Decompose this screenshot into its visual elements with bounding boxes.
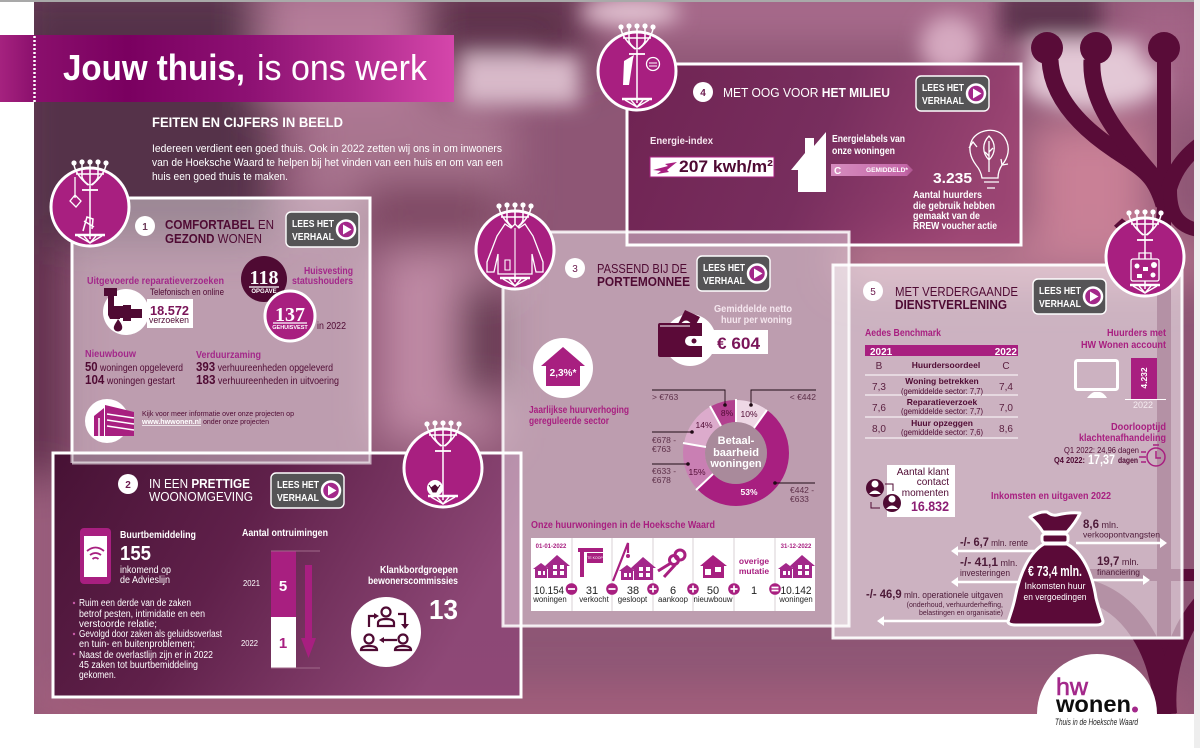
title banner [0,35,454,102]
button [286,212,359,247]
new build: 50 woningen opgeleverd [85,359,183,374]
voucher stat [913,170,997,232]
stock table: 38 [627,585,639,597]
heading: DIENSTVERLENING [895,297,1007,312]
stock table: mutatie [739,566,769,576]
stock table: 01-01-2022 [536,544,567,550]
logo: hw wonen: hw [1056,674,1089,701]
status holders: 137 [275,304,305,326]
stock table [531,519,815,611]
heading [165,217,274,246]
income and expenses: -/- 6,7 mln. rente [960,535,1028,549]
voucher stat: RREW voucher actie [913,221,997,232]
icon: keys [658,550,685,577]
status holders: statushouders [292,275,353,287]
energy index [650,135,774,177]
account stat: HW Wonen account [1081,339,1166,351]
chart: evictions: 1 [279,635,287,652]
bullets: Naast de overlastlijn zijn er in 2022 [79,650,213,661]
icon: houses end [778,555,815,578]
stock table: nieuwbouw [693,595,733,604]
status holders [241,256,353,341]
chart: affordability donut [652,390,816,504]
stock table: 10.142 [780,585,812,597]
decorative coat rack silhouette [1031,32,1200,714]
number 5 [863,281,883,301]
title [63,47,428,88]
chart: evictions [241,527,328,668]
complaints handling [1054,421,1166,467]
new build [85,348,183,387]
stock table: 50 [707,585,719,597]
heading: PASSEND BIJ DE [597,261,687,276]
icon: new house [700,555,727,578]
sustainability: Verduurzaming [196,349,261,361]
income and expenses: Inkomsten en uitgaven 2022 [991,490,1111,502]
customer contacts: contact [917,477,949,488]
voucher stat: 3.235 [933,170,972,187]
mediation [120,529,196,586]
panel: light fills [72,198,1182,638]
complaints handling: dagen [1118,456,1138,465]
account stat: 4.232 [1139,367,1149,389]
icon: monitor [1076,360,1118,398]
bullets: verstoorde relatie; [79,619,157,630]
chart: affordability donut: baarheid [713,447,759,459]
stock table: gesloopt [618,595,648,604]
icon: coat rack with jacket [598,23,676,110]
number 2 [118,474,138,494]
income and expenses: € 73,4 mln. [1028,563,1082,580]
energy labels: Energielabels van [832,134,905,145]
income and expenses: investeringen [960,568,1010,578]
stock table: verkocht [579,595,610,604]
sounding boards: 13 [429,594,458,625]
average rent: Gemiddelde netto [714,304,792,315]
heading: MET OOG VOOR HET MILIEU [723,85,890,100]
panel 1: comfortabel en gezond wonen [51,159,359,443]
icon: money bag [1008,512,1103,625]
arrows [877,538,1167,626]
benchmark table: 8,6 [999,424,1013,435]
button [271,473,344,508]
repair requests: verzoeken [149,315,189,326]
complaints handling: Doorlooptijd [1111,421,1166,433]
income and expenses [866,490,1167,626]
heading: COMFORTABEL EN [165,217,274,232]
repair requests: 18.572 [150,303,189,318]
icon: house silhouette [791,132,826,192]
repair requests: Uitgevoerde reparatieverzoeken [87,275,224,287]
income and expenses: verkoopontvangsten [1083,530,1160,540]
heading [149,476,253,504]
icon: demolition [613,543,656,581]
voucher stat: Aantal huurders [913,190,982,201]
heading: IN EEN PRETTIGE [149,476,250,491]
complaints handling: Q1 2022: 24,96 dagen [1064,445,1139,455]
button [916,76,989,111]
bullets: 45 zaken tot buurtbemiddeling [79,660,198,671]
benchmark table: Woning betrekken [905,376,979,386]
logo: hw wonen: Thuis in de Hoeksche Waard [1055,717,1138,728]
bullets: Ruim een derde van de zaken [79,598,191,609]
benchmark table: 2022 [995,347,1017,358]
chart: affordability donut: 53% [740,487,758,497]
chart: affordability donut: 10% [740,409,758,419]
stock table: 10.154 [534,585,564,597]
chart: affordability donut: Betaal- [718,435,755,447]
chart: affordability donut: €678 [652,475,671,485]
button [1033,279,1106,314]
account stat [1076,327,1166,410]
benchmark table: (gemiddelde sector: 7,7) [901,386,983,396]
chart: affordability donut: €763 [652,444,671,454]
chart: evictions: Aantal ontruimingen [242,527,328,539]
account stat: Huurders met [1107,327,1166,339]
complaints handling: Q4 2022: [1054,456,1085,465]
chart: evictions: 2021 [243,578,260,588]
sustainability [196,349,339,387]
number 5: 5 [870,287,876,298]
number 1 [135,216,155,236]
benchmark table [865,327,1018,438]
benchmark table: C [1002,361,1010,372]
icon: coat rack with suitcase [1106,209,1184,296]
benchmark table: 7,6 [872,403,886,414]
number 4 [693,82,713,102]
icon: houses start [533,555,570,578]
repair requests [87,275,224,335]
bullets [73,598,222,681]
chart: affordability donut: €633 - [652,466,676,476]
icon: coat rack with coat [476,202,554,289]
icon: people [866,479,901,512]
stock table: overige [739,556,769,566]
panel: dark fills [53,64,1021,697]
rent increase: 2,3%* [550,368,576,379]
energy labels: onze woningen [832,146,895,157]
status holders: 118 [250,267,278,289]
intro text: huis een goed thuis te maken. [152,171,288,183]
project link: Kijk voor meer informatie over onze projecten op [142,411,294,418]
mediation: de Advieslijn [120,575,170,586]
stock table: Onze huurwoningen in de Hoeksche Waard [531,519,715,531]
average rent [658,304,792,366]
benchmark table: Huur opzeggen [911,418,973,428]
arrow: decrease [301,565,316,658]
status holders: OPGAVE [251,289,277,295]
sustainability: 183 verhuureenheden in uitvoering [196,372,339,387]
chart: affordability donut: €678 - [652,435,676,445]
heading: MET VERDERGAANDE [895,284,1018,299]
energy labels: C [834,166,841,177]
energy index: Energie-index [650,135,713,147]
bullets: gekomen. [79,670,116,681]
stock table: 31 [586,585,598,597]
benchmark table: 2021 [870,347,893,358]
heading [597,261,690,289]
chart: affordability donut: 8% [721,408,734,418]
stock table: 1 [751,585,757,597]
income and expenses: en vergoedingen [1024,592,1086,603]
complaints handling: 17,37 [1088,451,1115,467]
stock table: 31-12-2022 [781,544,812,550]
customer contacts: Aantal klant [897,467,949,478]
energy index: 207 kwh/m² [679,157,773,176]
sounding boards: Klankbordgroepen [380,564,458,576]
benchmark table: (gemiddelde sector: 7,6) [901,427,983,437]
intro text: Iedereen verdient een goed thuis. Ook in 2022 zetten wij ons in om inwoners [152,143,502,155]
number 3: 3 [572,264,578,275]
status holders: Huisvesting [304,265,353,277]
customer contacts [866,465,955,517]
panel 2: in een prettige woonomgeving [73,420,482,681]
benchmark table: B [876,361,883,372]
income and expenses: Inkomsten huur [1024,581,1086,592]
project link: www.hwwonen.nl [141,419,201,426]
repair requests: Telefonisch en online [150,287,224,297]
number 1: 1 [142,222,148,233]
button [697,256,770,291]
heading: WOONOMGEVING [149,489,253,504]
panel 3: passend bij de portemonnee [476,202,816,611]
rent increase [529,338,629,427]
stock table: woningen [532,595,567,604]
bullets: en tuin- en buitenproblemen; [79,639,195,650]
heading [895,284,1018,312]
new build: 104 woningen gestart [85,372,175,387]
logo: hw wonen: wonen [1055,691,1131,717]
title: Jouw thuis, [63,47,245,88]
heading: GEZOND WONEN [165,231,262,246]
chart: evictions: 2022 [241,638,258,648]
icon: coat rack with football [404,420,482,507]
customer contacts: 16.832 [911,498,949,514]
benchmark table: 7,0 [999,403,1013,414]
icon: bulb with leaf [969,130,1008,188]
benchmark table: (gemiddelde sector: 7,7) [901,406,983,416]
heading: PORTEMONNEE [597,274,690,289]
benchmark table: 7,3 [872,382,886,393]
account stat: 2022 [1133,400,1153,410]
status holders: in 2022 [317,321,346,332]
benchmark table: 8,0 [872,424,886,435]
number 2: 2 [125,480,131,491]
project link [141,411,294,426]
icon: participation circle [351,597,421,667]
energy labels: GEMIDDELD* [866,168,909,174]
stock table: woningen [778,595,813,604]
voucher stat: die gebruik hebben [913,201,995,212]
average rent: € 604 [717,334,761,353]
rent increase: Jaarlijkse huurverhoging [529,405,629,416]
bullets: Gevolgd door zaken als geluidsoverlast [79,629,222,640]
income and expenses: -/- 46,9 mln. operationele uitgaven [866,587,1003,601]
mediation: Buurtbemiddeling [120,529,196,541]
icon: stopwatch [1139,445,1165,466]
complaints handling: klachtenafhandeling [1079,432,1166,444]
panel 4: met oog voor het milieu [598,23,1008,232]
icon: coat rack with keys [51,159,129,246]
logo: hw wonen [1037,654,1157,728]
rent increase: gereguleerde sector [529,416,609,427]
income and expenses: -/- 41,1 mln. [960,555,1018,569]
sounding boards [368,564,458,625]
icon: for sale sign: TE KOOP [587,556,603,560]
bullets: betrof pesten, intimidatie en een [79,609,205,620]
icon: phone [80,528,111,584]
mediation: 155 [120,543,151,565]
icon: for sale sign [578,548,603,577]
chart: affordability donut: €442 - [790,485,814,495]
chart: affordability donut: > €763 [652,392,679,402]
icon: building [85,399,134,443]
chart: evictions: 5 [279,578,287,595]
mediation: inkomend op [120,565,171,576]
status holders: GEHUISVEST [272,325,308,331]
energy labels [831,134,913,177]
chart: affordability donut: < €442 [790,392,816,402]
icon: wallet [658,310,702,357]
income and expenses: (onderhoud, verhuurderheffing, [907,602,1003,609]
chart: affordability donut: 14% [695,420,713,430]
customer contacts: momenten [902,488,949,499]
income and expenses: 8,6 mln. [1083,519,1119,531]
new build: Nieuwbouw [85,348,137,360]
project link: onder onze projecten [203,419,269,426]
average rent: huur per woning [721,315,792,326]
intro text: FEITEN EN CIJFERS IN BEELD [152,115,343,130]
chart: affordability donut: 15% [688,467,706,477]
income and expenses: belastingen en organisatie) [919,610,1003,617]
income and expenses: financiering [1097,567,1140,577]
panel 5: met verdergaande dienstverlening [863,209,1184,626]
intro text: van de Hoeksche Waard te helpen bij het vinden van een huis en om van een [152,157,503,169]
voucher stat: gemaakt van de [913,211,980,222]
stock table: 6 [670,585,676,597]
benchmark table: 7,4 [999,382,1013,393]
number 3 [565,258,585,278]
title: is ons werk [257,47,428,88]
intro text [152,115,503,183]
panel frames [53,64,1182,697]
benchmark table: Reparatieverzoek [907,397,977,407]
chart: affordability donut: €633 [790,494,809,504]
benchmark table: Aedes Benchmark [865,327,941,339]
chart: affordability donut: woningen [709,458,762,470]
sounding boards: bewonerscommissies [368,575,458,587]
sustainability: 393 verhuureenheden opgeleverd [196,359,333,374]
stock table: aankoop [658,595,689,604]
benchmark table: Huurdersoordeel [912,360,980,370]
number 4: 4 [700,88,706,99]
income and expenses: 19,7 mln. [1097,556,1139,568]
